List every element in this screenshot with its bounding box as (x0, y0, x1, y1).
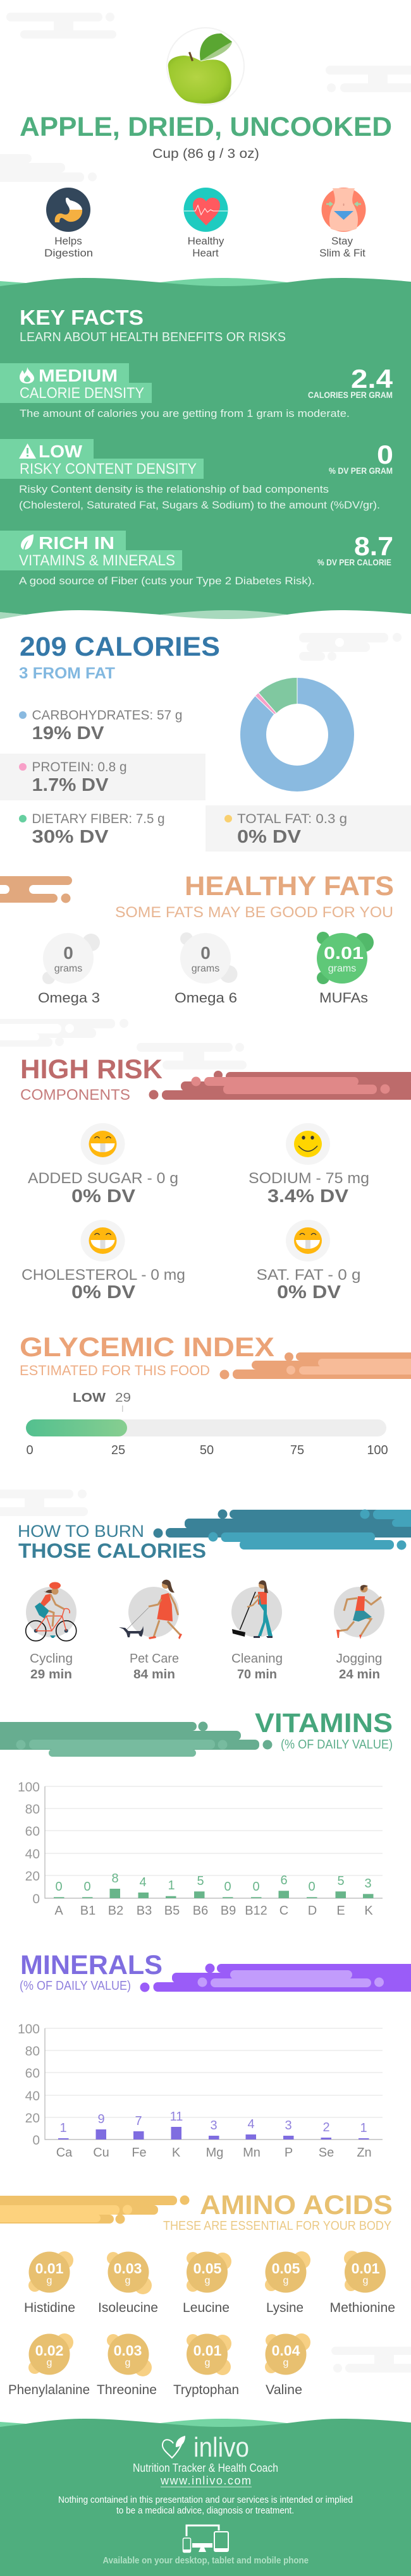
amino acid: phenylalanine: 0.02 (35, 2342, 63, 2359)
bar chart: vitamins: 100 (18, 1780, 40, 1795)
macro: dietary fiber: 30% DV (32, 827, 109, 847)
benefit: stay slim and fit: Slim & Fit (319, 247, 365, 259)
bar chart: minerals: 1 (59, 2121, 67, 2135)
bar chart: minerals: Cu (93, 2146, 109, 2160)
panel: how to burn calories (18, 1510, 411, 1682)
bar chart: vitamins: B3 (137, 1904, 152, 1918)
bar chart: vitamins: B1 (80, 1904, 95, 1918)
amino acid: methionine: 0.01 (352, 2260, 380, 2277)
amino acid: isoleucine: 0.03 (114, 2260, 142, 2277)
amino acid: isoleucine (98, 2251, 158, 2315)
bar chart: vitamins: E (336, 1904, 345, 1918)
panel: key facts (0, 278, 411, 619)
badge: medium calorie density: MEDIUM (39, 366, 118, 385)
stat: 0 percent DV per gram: % DV PER GRAM (329, 466, 393, 476)
component: added sugar (28, 1123, 178, 1207)
panel: amino acids (0, 2190, 395, 2397)
amino acid: threonine: 0.03 (114, 2342, 142, 2359)
stat: 2.4 calories per gram: 2.4 (351, 364, 393, 394)
amino acid: leucine: g (205, 2275, 210, 2286)
amino acid: valine (265, 2333, 310, 2397)
gauge: glycemic value marker: 29 (115, 1391, 131, 1405)
subheading: components: COMPONENTS (20, 1086, 130, 1104)
activity: pet care (119, 1580, 182, 1682)
amino acid: lysine: g (283, 2275, 288, 2286)
amino acid: methionine: g (363, 2275, 368, 2286)
subheading: (% OF DAILY VALUE) (281, 1738, 393, 1752)
gauge: axis labels: 50 (200, 1443, 214, 1457)
activity: cleaning (231, 1580, 283, 1682)
subheading: THESE ARE ESSENTIAL FOR YOUR BODY (163, 2219, 391, 2233)
benefit: healthy heart (183, 188, 228, 259)
subheading: LEARN ABOUT HEALTH BENEFITS OR RISKS (20, 330, 286, 344)
disclaimer: Nothing contained in this presentation and our services is intended or implied (58, 2495, 353, 2505)
bar chart: vitamins: B9 (221, 1904, 236, 1918)
component: saturated fat: SAT. FAT - 0 g (257, 1267, 360, 1284)
bar chart: minerals: Zn (357, 2146, 372, 2160)
amino acid: leucine: Leucine (183, 2301, 230, 2315)
subheading: SOME FATS MAY BE GOOD FOR YOU (115, 904, 393, 921)
amino acid: threonine: g (125, 2357, 130, 2368)
heading: amino acids: AMINO ACIDS (200, 2190, 393, 2220)
activity: jogging: 24 min (339, 1668, 380, 1682)
component: sodium: SODIUM - 75 mg (248, 1170, 369, 1187)
badge: rich in vitamins and minerals: RICH IN (39, 533, 114, 553)
heading: how to burn: HOW TO BURN (18, 1522, 144, 1541)
benefit: helps digestion (44, 188, 93, 259)
bar chart: vitamins: B2 (108, 1904, 123, 1918)
stat: 8.7 percent DV per calorie: 8.7 (354, 531, 393, 561)
bar chart: minerals (18, 2022, 383, 2160)
gauge: axis labels: 25 (111, 1443, 125, 1457)
gauge: axis labels: 0 (26, 1443, 34, 1457)
gauge: axis labels: 75 (290, 1443, 304, 1457)
heading: healthy fats: HEALTHY FATS (185, 871, 394, 901)
amino acid: isoleucine: g (125, 2275, 130, 2286)
bar chart: vitamins: 5 (337, 1874, 345, 1888)
bar chart: minerals: 60 (25, 2066, 40, 2081)
macro: total fat: TOTAL FAT: 0.3 g (237, 812, 347, 826)
bar chart: vitamins: 0 (32, 1892, 40, 1906)
gauge: axis labels (26, 1443, 388, 1457)
bar chart: minerals: 3 (210, 2119, 218, 2133)
macro: total fat: 0% DV (237, 827, 302, 847)
macro: carbohydrates: 19% DV (32, 723, 104, 743)
amino acid: isoleucine: Isoleucine (98, 2301, 158, 2315)
badge: low risky content density: RISKY CONTENT DENSITY (20, 460, 197, 478)
fat: omega 6: 0 (200, 943, 211, 963)
tagline: Nutrition Tracker & Health Coach (133, 2462, 278, 2474)
activity: pet care: 84 min (133, 1668, 175, 1682)
amino acid: valine: g (283, 2357, 288, 2368)
bar chart: minerals: 4 (247, 2117, 255, 2131)
amino acid: histidine: g (47, 2275, 52, 2286)
bar chart: minerals: 3 (285, 2119, 292, 2133)
bar chart: vitamins (18, 1780, 383, 1918)
amino acid: histidine: Histidine (24, 2301, 75, 2315)
activity: cycling (26, 1582, 77, 1682)
activity: cycling: Cycling (30, 1652, 73, 1666)
fat: omega 6 (175, 932, 238, 1006)
component: cholesterol (21, 1220, 185, 1303)
heading: vitamins: VITAMINS (255, 1708, 393, 1738)
gauge: glycemic bar (26, 1419, 386, 1436)
bar chart: minerals: Mg (206, 2146, 223, 2160)
amino acid: leucine (183, 2251, 231, 2315)
bar chart: vitamins: 20 (25, 1869, 40, 1884)
amino acid: histidine: 0.01 (35, 2260, 64, 2277)
subheading: (% OF DAILY VALUE) (20, 1979, 131, 1993)
decorative banner: glycemic index (220, 1352, 411, 1380)
bar chart: minerals: 1 (360, 2121, 367, 2135)
decorative banner: healthy fats (0, 876, 72, 903)
heading: glycemic index: GLYCEMIC INDEX (20, 1332, 274, 1363)
bar chart: minerals: 0 (32, 2133, 40, 2148)
stat: 8.7 percent DV per calorie: % DV PER CALORIE (317, 557, 391, 567)
heading: minerals: MINERALS (20, 1950, 163, 1980)
amino acid: phenylalanine (8, 2333, 90, 2397)
component: sodium (248, 1123, 369, 1207)
subheading: ESTIMATED FOR THIS FOOD (20, 1363, 210, 1378)
bar chart: minerals: 80 (25, 2044, 40, 2059)
stat: 8.7 percent DV per calorie (317, 531, 393, 567)
component: saturated fat: 0% DV (277, 1282, 341, 1303)
disclaimer: to be a medical advice, diagnosis or treatment. (116, 2505, 294, 2516)
bar chart: vitamins: 8 (111, 1872, 119, 1886)
food image: green apple (167, 28, 244, 105)
panel: high risk components (20, 1054, 411, 1303)
component: added sugar: 0% DV (71, 1186, 136, 1207)
amino acid: tryptophan: g (205, 2357, 210, 2368)
bar chart: minerals: Mn (243, 2146, 261, 2160)
text: risky content note: Risky Content density is the relationship of bad components (19, 483, 329, 495)
panel: glycemic index (20, 1332, 411, 1457)
decorative banner: minerals (140, 1963, 411, 1992)
bar chart: vitamins: D (308, 1904, 317, 1918)
bar chart: minerals: 40 (25, 2089, 40, 2104)
fat: mufas: grams (328, 963, 356, 974)
panel: healthy fats (0, 871, 394, 1006)
stat: 0 percent DV per gram: 0 (377, 440, 393, 469)
bar chart: minerals: 2 (322, 2121, 330, 2134)
serving size: Cup (86 g / 3 oz) (152, 147, 259, 161)
bar chart: vitamins: C (279, 1904, 288, 1918)
fat: omega 3: Omega 3 (38, 990, 100, 1006)
amino acid: valine: Valine (266, 2383, 302, 2397)
benefit: helps digestion: Digestion (44, 247, 93, 259)
availability note: Available on your desktop, tablet and mobile phone (102, 2555, 309, 2566)
activity: jogging (334, 1585, 384, 1682)
subheading: 3 from fat: 3 FROM FAT (19, 665, 115, 682)
decorative banner: amino acids (0, 2196, 190, 2224)
row: protein background (0, 754, 206, 800)
bar chart: minerals: 20 (25, 2111, 40, 2126)
heading: key facts: KEY FACTS (20, 306, 144, 329)
bar chart: minerals: 7 (135, 2114, 142, 2128)
benefit: stay slim and fit (319, 188, 365, 259)
bar chart: minerals: Ca (56, 2146, 73, 2160)
badge: rich in vitamins and minerals: VITAMINS & MINERALS (19, 552, 175, 569)
bar chart: vitamins: 6 (280, 1874, 288, 1887)
text: risky content note (19, 483, 380, 511)
text: calorie density note: The amount of calories you are getting from 1 gram is moderate. (20, 407, 350, 419)
bar chart: vitamins: 0 (308, 1880, 316, 1894)
stat: 2.4 calories per gram (308, 364, 393, 400)
macro: carbohydrates (19, 708, 182, 743)
fat: omega 3: grams (54, 963, 82, 974)
decorative banner: vitamins (0, 1722, 272, 1757)
website link: www.inlivo.com (160, 2474, 251, 2487)
gauge: glycemic value marker (73, 1391, 131, 1412)
benefit: healthy heart: Healthy (188, 235, 224, 247)
amino acid: phenylalanine: g (47, 2357, 52, 2368)
badge: low risky content density (0, 439, 204, 479)
bar chart: vitamins: 80 (25, 1802, 40, 1817)
bar chart: minerals: Se (319, 2146, 334, 2160)
macro: dietary fiber (19, 812, 164, 847)
bar chart: vitamins: B5 (164, 1904, 180, 1918)
panel: calories (0, 632, 411, 852)
bar chart: vitamins: K (364, 1904, 373, 1918)
fat: omega 3: 0 (63, 943, 73, 963)
bar chart: vitamins: 1 (168, 1879, 175, 1893)
benefit: stay slim and fit: Stay (331, 235, 353, 247)
amino acid: methionine (330, 2251, 395, 2315)
heading: those calories: THOSE CALORIES (18, 1539, 206, 1562)
amino acid: lysine (265, 2251, 310, 2315)
disclaimer (58, 2495, 353, 2516)
fat: mufas: MUFAs (319, 990, 368, 1006)
donut chart (253, 678, 341, 778)
badge: rich in vitamins and minerals (0, 531, 182, 570)
activity: cycling: 29 min (30, 1668, 72, 1682)
logo: inlivo (163, 2432, 249, 2463)
amino acid: threonine (97, 2333, 157, 2397)
stat: 0 percent DV per gram (329, 440, 393, 476)
fat: omega 6: Omega 6 (175, 990, 237, 1006)
macro: protein: 1.7% DV (32, 775, 109, 795)
footer panel (0, 2419, 411, 2576)
activity: pet care: Pet Care (130, 1652, 179, 1666)
bar chart: vitamins: B12 (245, 1904, 267, 1918)
bar chart: vitamins: 4 (139, 1875, 147, 1889)
component: added sugar: ADDED SUGAR - 0 g (28, 1170, 178, 1187)
gauge: glycemic value marker: LOW (73, 1391, 106, 1405)
text: risky content note: (Cholesterol, Saturated Fat, Sugars & Sodium) to the amount (%DV/gr). (19, 499, 380, 511)
badge: medium calorie density: CALORIE DENSITY (20, 385, 144, 402)
fat: mufas: 0.01 (324, 943, 364, 963)
panel: vitamins (0, 1708, 393, 1918)
component: cholesterol: CHOLESTEROL - 0 mg (21, 1267, 185, 1284)
logo: inlivo: inlivo (193, 2432, 249, 2463)
bar chart: minerals: Fe (132, 2146, 147, 2160)
heading: high risk: HIGH RISK (20, 1054, 163, 1085)
decorative banner: burn calories (153, 1510, 411, 1550)
macro: protein (19, 760, 126, 795)
badge: low risky content density: LOW (39, 442, 83, 461)
fat: mufas (317, 932, 374, 1006)
title: APPLE, DRIED, UNCOOKED (20, 112, 392, 142)
activity: cleaning: 70 min (237, 1668, 277, 1682)
decorative banner: high risk (149, 1071, 411, 1100)
bar chart: vitamins: 0 (55, 1880, 63, 1894)
amino acid: lysine: 0.05 (272, 2260, 300, 2277)
bar chart: minerals: K (172, 2146, 181, 2160)
stat: 2.4 calories per gram: CALORIES PER GRAM (308, 390, 393, 400)
text: fiber note: A good source of Fiber (cuts your Type 2 Diabetes Risk). (19, 575, 315, 587)
amino acid: tryptophan: Tryptophan (173, 2383, 239, 2397)
panel: minerals (18, 1950, 411, 2160)
component: sodium: 3.4% DV (267, 1186, 349, 1207)
bar chart: vitamins: 0 (83, 1880, 91, 1894)
fat: omega 3 (38, 933, 100, 1006)
activity: jogging: Jogging (336, 1652, 382, 1666)
macro: dietary fiber: DIETARY FIBER: 7.5 g (32, 812, 164, 826)
activity: cleaning: Cleaning (231, 1652, 283, 1666)
amino acid: threonine: Threonine (97, 2383, 157, 2397)
amino acid: leucine: 0.05 (193, 2260, 222, 2277)
row: total fat background (206, 805, 411, 852)
macro: total fat (224, 812, 347, 847)
amino acid: phenylalanine: Phenylalanine (8, 2383, 90, 2397)
component: cholesterol: 0% DV (71, 1282, 136, 1303)
badge: medium calorie density (0, 363, 152, 403)
amino acid: histidine (24, 2251, 75, 2315)
bar chart: minerals: 100 (18, 2022, 40, 2037)
bar chart: minerals: 9 (97, 2112, 105, 2126)
macro: carbohydrates: CARBOHYDRATES: 57 g (32, 708, 182, 723)
bar chart: vitamins: A (54, 1904, 63, 1918)
fat: omega 6: grams (192, 963, 219, 974)
bar chart: vitamins: B6 (193, 1904, 208, 1918)
bar chart: minerals: P (285, 2146, 293, 2160)
amino acid: tryptophan: 0.01 (193, 2342, 222, 2359)
bar chart: vitamins: 40 (25, 1847, 40, 1862)
bar chart: vitamins: 5 (197, 1874, 204, 1888)
macro: protein: PROTEIN: 0.8 g (32, 760, 126, 774)
amino acid: lysine: Lysine (266, 2301, 304, 2315)
bar chart: vitamins: 0 (224, 1880, 231, 1894)
bar chart: minerals: 11 (170, 2110, 183, 2124)
amino acid: methionine: Methionine (330, 2301, 395, 2315)
gauge: axis labels: 100 (367, 1443, 388, 1457)
heading: 209 calories: 209 CALORIES (20, 632, 220, 662)
icon: devices (183, 2525, 228, 2552)
amino acid: tryptophan (173, 2333, 239, 2397)
amino acid: valine: 0.04 (272, 2342, 300, 2359)
benefit: healthy heart: Heart (192, 247, 219, 259)
bar chart: vitamins: 60 (25, 1824, 40, 1839)
component: saturated fat (257, 1220, 360, 1303)
bar chart: vitamins: 0 (252, 1880, 260, 1894)
benefit: helps digestion: Helps (54, 235, 82, 247)
bar chart: vitamins: 3 (364, 1877, 372, 1891)
